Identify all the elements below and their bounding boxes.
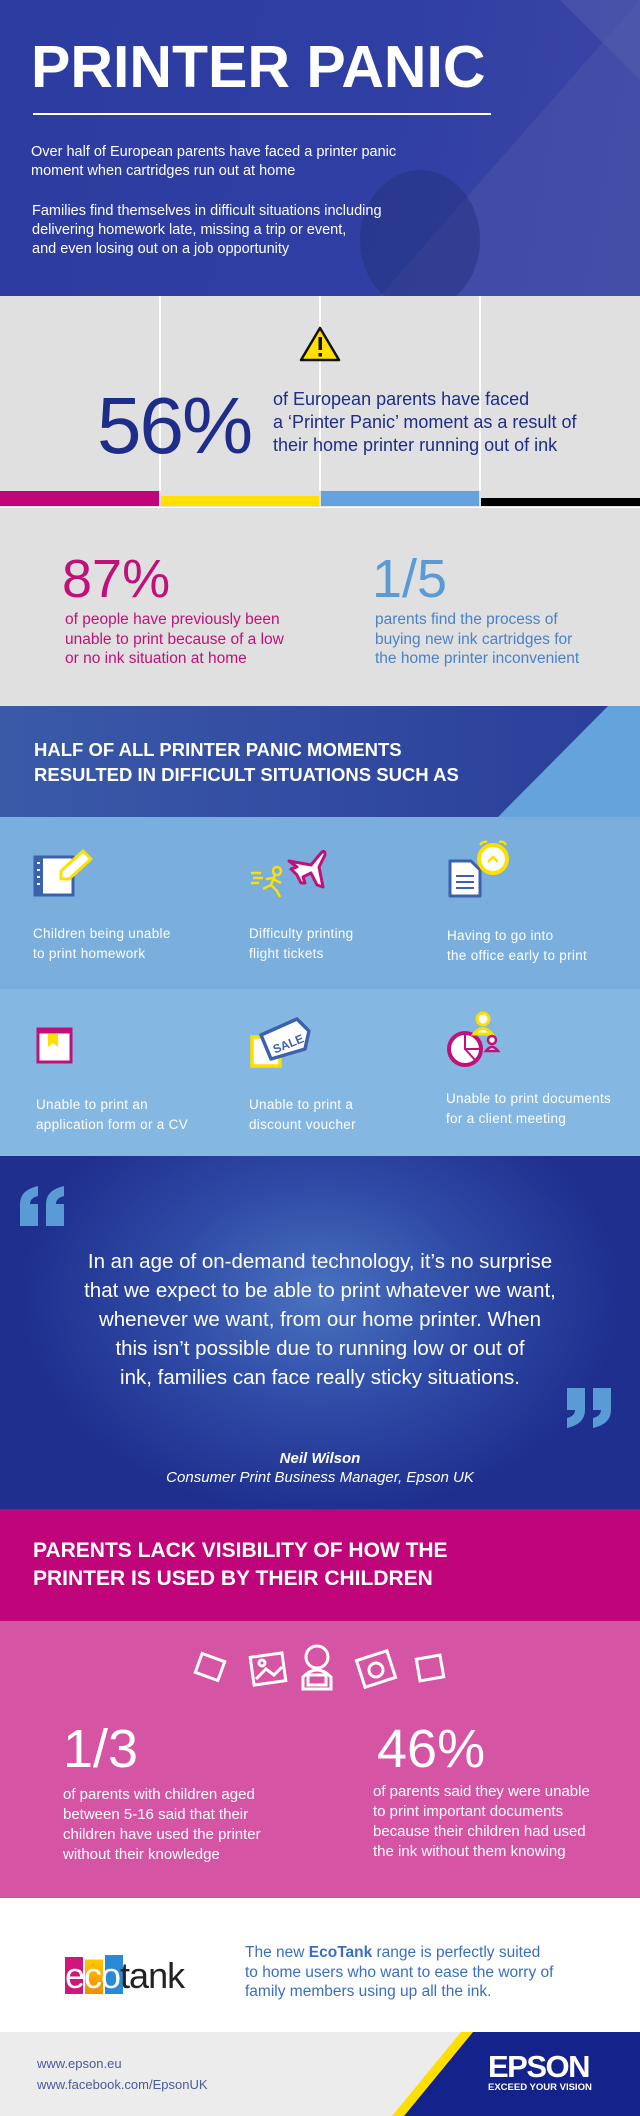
quote text: In an age of on-demand technology, it’s no surprise (88, 1250, 552, 1273)
panel: parents stats (0, 1621, 640, 1898)
stat 87%: 87% (62, 549, 170, 609)
label: for a client meeting (446, 1111, 566, 1126)
heading (34, 739, 459, 785)
label: to print homework (33, 946, 145, 961)
icon: pie chart and people (447, 1012, 500, 1067)
label: application form or a CV (36, 1117, 188, 1132)
stat 1/5: buying new ink cartridges for (375, 630, 572, 648)
panel: header (0, 0, 640, 296)
panel: parents heading (0, 1509, 640, 1621)
label (36, 1097, 188, 1132)
logo: epson: EXCEED YOUR VISION (488, 2082, 592, 2093)
icon: notebook and pencil (34, 849, 93, 896)
panel: 56% stat (0, 296, 640, 507)
stat 46%: because their children had used (373, 1823, 586, 1840)
stat text: of European parents have faced (273, 389, 529, 409)
ecotank text (245, 1944, 554, 2000)
links: www.facebook.com/EpsonUK (37, 2077, 208, 2092)
attribution (166, 1450, 474, 1486)
stat 1/3: 1/3 (63, 1719, 138, 1779)
label: Unable to print an (36, 1097, 148, 1112)
intro text 2: Families find themselves in difficult situations including (32, 203, 382, 219)
links (37, 2056, 208, 2092)
stat 1/3 (63, 1719, 261, 1863)
quote text: that we expect to be able to print whatever we want, (84, 1279, 556, 1302)
big number 56%: 56% (97, 381, 251, 470)
item: voucher (249, 1017, 356, 1132)
stat 1/3: of parents with children aged (63, 1786, 255, 1803)
icon: book (36, 1028, 72, 1064)
panel: two stats (0, 508, 640, 706)
item: homework (33, 849, 171, 961)
icon: sale tag: SALE (271, 1031, 306, 1056)
heading (33, 1539, 448, 1590)
quote text: ink, families can face really sticky situations. (120, 1366, 520, 1389)
stat 1/5: parents find the process of (375, 611, 558, 628)
item: client meeting (446, 1012, 611, 1126)
label: flight tickets (249, 946, 324, 961)
stat 1/3: children have used the printer (63, 1826, 261, 1843)
panel: ecotank (0, 1898, 640, 2032)
heading: HALF OF ALL PRINTER PANIC MOMENTS (34, 739, 402, 760)
intro text 2: and even losing out on a job opportunity (32, 241, 289, 257)
stat 46%: to print important documents (373, 1803, 563, 1820)
stat 87%: or no ink situation at home (65, 650, 247, 667)
ecotank text: The new EcoTank range is perfectly suited (245, 1944, 540, 1961)
links: www.epson.eu (37, 2056, 122, 2071)
ecotank text: family members using up all the ink. (245, 1983, 491, 2000)
stat 46%: 46% (377, 1719, 485, 1779)
stat 1/5: 1/5 (372, 549, 447, 609)
stat 87% (62, 549, 284, 667)
icon: warning (300, 326, 340, 362)
icon: document and clock (448, 840, 509, 898)
title: PRINTER PANIC (31, 34, 486, 100)
icon: runner and plane (251, 850, 326, 898)
label: Unable to print a (249, 1097, 353, 1112)
heading: PARENTS LACK VISIBILITY OF HOW THE (33, 1539, 448, 1562)
intro text: Over half of European parents have faced a printer panic (31, 144, 396, 160)
label: Children being unable (33, 926, 171, 941)
panel: quote (0, 1156, 640, 1510)
colour bars (0, 491, 640, 506)
label (33, 926, 171, 961)
panel: footer (0, 2032, 640, 2116)
label: Having to go into (447, 928, 553, 943)
stat 87%: unable to print because of a low (65, 630, 284, 648)
label: discount voucher (249, 1117, 356, 1132)
stat text: a ‘Printer Panic’ moment as a result of (273, 412, 576, 432)
stat 1/5: the home printer inconvenient (375, 650, 579, 667)
quote text: whenever we want, from our home printer. When (99, 1308, 541, 1331)
attribution: Neil Wilson (280, 1450, 360, 1467)
stat 87%: of people have previously been (65, 611, 280, 628)
label (249, 1097, 356, 1132)
quote text (84, 1250, 556, 1389)
intro text 2 (32, 203, 382, 257)
label: Unable to print documents (446, 1091, 611, 1106)
stat 46%: of parents said they were unable (373, 1783, 590, 1800)
logo: ecotank: ecotank (65, 1955, 184, 1996)
panel: situations grid (0, 817, 640, 1156)
open quote mark (20, 1186, 64, 1226)
icon: sale tag (250, 1017, 311, 1068)
stat 46% (373, 1719, 590, 1860)
attribution: Consumer Print Business Manager, Epson UK (166, 1469, 474, 1486)
stat text (273, 389, 577, 455)
quote text: this isn’t possible due to running low or out of (115, 1337, 525, 1360)
panel: situations heading (0, 706, 640, 817)
label (447, 928, 587, 963)
stat text: their home printer running out of ink (273, 435, 557, 455)
item: office early (447, 840, 587, 963)
stat 1/3: without their knowledge (63, 1846, 220, 1863)
item: CV (36, 1028, 188, 1132)
intro text: moment when cartridges run out at home (31, 163, 295, 179)
ecotank text: to home users who want to ease the worry of (245, 1964, 553, 1981)
label (446, 1091, 611, 1126)
heading: RESULTED IN DIFFICULT SITUATIONS SUCH AS (34, 764, 459, 785)
icons row (193, 1644, 446, 1690)
label: the office early to print (447, 948, 587, 963)
intro text 2: delivering homework late, missing a trip or event, (32, 222, 346, 238)
stat 1/5 (372, 549, 580, 667)
item: flight tickets (249, 850, 354, 961)
heading: PRINTER IS USED BY THEIR CHILDREN (33, 1567, 433, 1590)
stat 46%: the ink without them knowing (373, 1843, 566, 1860)
stat 1/3: between 5-16 said that their (63, 1806, 248, 1823)
intro text (31, 144, 396, 179)
label: Difficulty printing (249, 926, 354, 941)
close quote mark (567, 1388, 611, 1428)
logo: epson: EPSON (488, 2049, 589, 2084)
label (249, 926, 354, 961)
